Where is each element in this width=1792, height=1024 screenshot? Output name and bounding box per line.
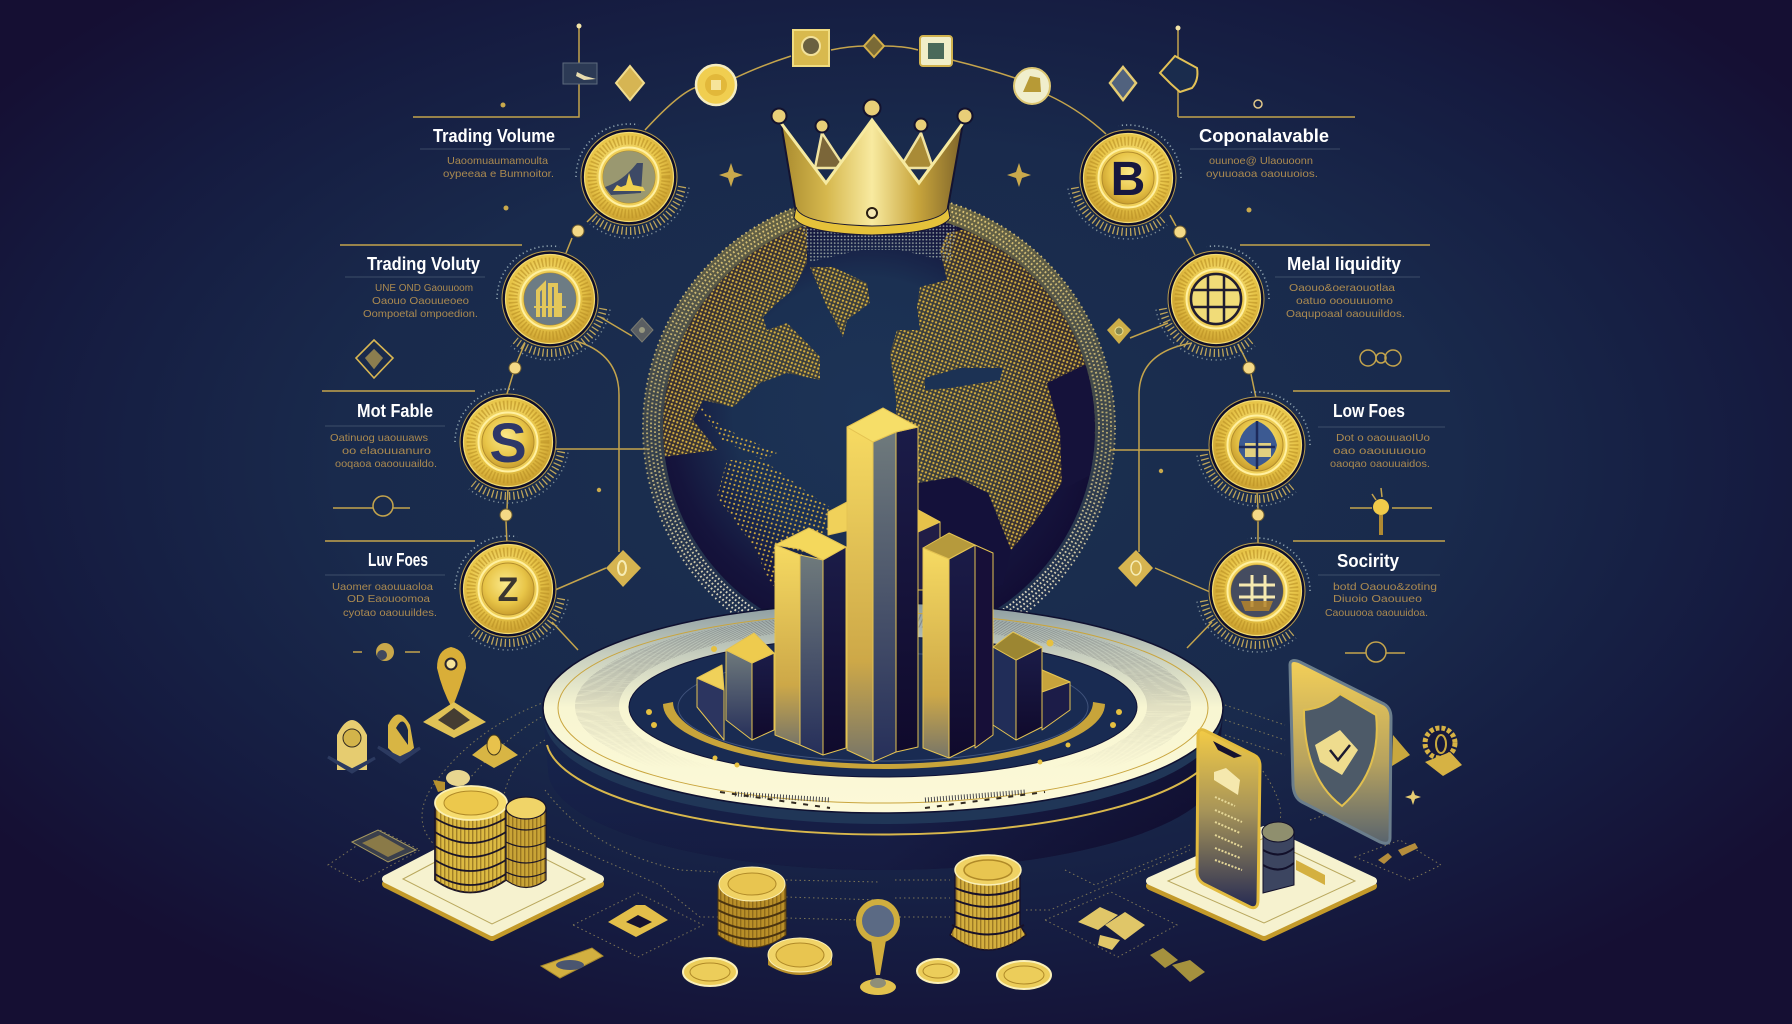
bar: far back right bbox=[918, 510, 940, 590]
coin: security grid bbox=[1197, 538, 1310, 652]
loose coin small bbox=[683, 958, 737, 986]
crown bbox=[772, 100, 972, 235]
top ornaments bbox=[333, 30, 1432, 662]
panel: Luv Foes: Luv Foes bbox=[368, 550, 428, 570]
trophy pin bbox=[856, 899, 900, 995]
panel: Mot Fable: oo elaouuanuro bbox=[342, 445, 431, 457]
crown body bbox=[781, 120, 963, 234]
left bottom icons bbox=[328, 647, 900, 995]
panel: Trading Voluty bbox=[340, 245, 522, 320]
coin: Z: Z bbox=[498, 571, 518, 609]
panel: Melal Iiquidity: Melal Iiquidity bbox=[1287, 254, 1401, 274]
icon: gold diamond left bbox=[606, 550, 641, 587]
panel: Socirity bbox=[1293, 541, 1445, 619]
panel: Melal Iiquidity: Oaqupoaal oaouuildos. bbox=[1286, 308, 1405, 320]
icon: outline diamond left bbox=[356, 340, 393, 378]
bar: far small right bbox=[1042, 670, 1070, 730]
panel: Luv Foes: OD Eaouoomoa bbox=[347, 593, 430, 605]
ornament: ring left bbox=[333, 496, 410, 516]
phone bbox=[1197, 730, 1260, 908]
ornament: bulb right bbox=[1350, 488, 1432, 535]
gold arc bbox=[663, 702, 1105, 769]
shape: gold tile bbox=[608, 905, 668, 937]
panel: Melal Iiquidity: Oaouo&oeraouotlaa bbox=[1289, 282, 1395, 294]
bar: center tallest bbox=[847, 408, 918, 762]
plate right bbox=[1150, 830, 1373, 937]
pedestal side bbox=[543, 715, 1223, 870]
panel: Mot Fable bbox=[322, 391, 475, 470]
icon: gold diamond right bbox=[1118, 550, 1153, 587]
loose coin bbox=[768, 938, 832, 975]
panel: Melal Iiquidity: oatuo ooouuuomo bbox=[1296, 295, 1393, 307]
small blocks bbox=[1150, 948, 1205, 982]
panel: Low Foes: Dot o oaouuaoIUo bbox=[1336, 432, 1430, 444]
panel: Coponalavable: Coponalavable bbox=[1199, 126, 1329, 146]
hatched ring bbox=[597, 620, 1169, 792]
inner disk bbox=[629, 637, 1137, 777]
panel: Melal Iiquidity bbox=[1240, 245, 1430, 320]
panel: Socirity: Caouuooa oaouuidoa. bbox=[1325, 607, 1428, 619]
link dots bbox=[500, 225, 1264, 521]
card bbox=[541, 948, 603, 978]
pedestal bbox=[543, 603, 1223, 870]
small circle bbox=[1254, 100, 1262, 108]
bottom hatch labels bbox=[735, 792, 1025, 800]
cylinder stack bbox=[1262, 822, 1294, 893]
document bbox=[352, 830, 416, 862]
panel: Trading Voluty: Oompoetal ompoedion. bbox=[363, 308, 478, 320]
dashed floor lines bbox=[328, 702, 1441, 957]
icon: diamond right bbox=[1110, 67, 1136, 100]
panel: Low Foes: oao oaouuuouo bbox=[1333, 445, 1426, 457]
crown stud bbox=[867, 208, 877, 218]
icon: top diamond bbox=[864, 35, 884, 57]
panel: Mot Fable: Oatinuog uaouuaws bbox=[330, 432, 428, 444]
coin: bitcoin bbox=[1068, 125, 1181, 239]
bar chart bbox=[697, 408, 1070, 762]
icon: shield outline bbox=[1160, 56, 1197, 92]
icon: diamond coin bbox=[472, 735, 518, 768]
coin: trading volume chart bbox=[576, 124, 689, 238]
bar: left tall bbox=[775, 528, 846, 755]
icon: small coin back bbox=[433, 770, 470, 792]
pedestal top bbox=[543, 603, 1223, 813]
gear badge bbox=[1425, 728, 1462, 776]
panel: Luv Foes bbox=[325, 541, 475, 619]
coin stack center right bbox=[950, 855, 1026, 950]
ornament: rings right bbox=[1360, 350, 1401, 366]
stars bbox=[500, 102, 1252, 492]
icon: map pin bbox=[423, 647, 486, 738]
plate left bbox=[386, 824, 600, 937]
icon: box bird bbox=[563, 63, 597, 84]
coin: globe grid bbox=[1156, 246, 1269, 360]
right bottom icons bbox=[917, 661, 1462, 989]
shield card bbox=[1290, 661, 1391, 843]
coin: Z bbox=[455, 536, 568, 650]
panel: Trading Volume bbox=[413, 24, 582, 180]
triangle bbox=[1392, 735, 1410, 766]
bar: far back left bbox=[828, 502, 850, 535]
icon: small diamond left bbox=[631, 318, 653, 342]
gold stick bbox=[1296, 860, 1325, 885]
panel: Mot Fable: Mot Fable bbox=[357, 401, 433, 421]
crown back points bbox=[815, 133, 933, 168]
panel: Trading Voluty: Trading Voluty bbox=[367, 254, 480, 274]
coin: bitcoin: B bbox=[1111, 153, 1145, 206]
icon: diamond left bbox=[616, 66, 644, 100]
coin stack small bbox=[506, 797, 546, 888]
coin: low fees blue bbox=[1197, 392, 1310, 506]
panel: Trading Volume: oypeeaa e Bumnoitor. bbox=[443, 168, 554, 180]
shape: gold blocks bbox=[1078, 907, 1145, 950]
bar: small left bbox=[726, 633, 774, 740]
loose coin a bbox=[917, 959, 959, 983]
icon: top square two bbox=[920, 36, 952, 66]
loose coin b bbox=[997, 961, 1051, 989]
pedestal rim bbox=[544, 610, 1222, 824]
icon: top square bbox=[793, 30, 829, 66]
small glyphs bbox=[1378, 843, 1418, 864]
panel: Socirity: Diuoio Oaouueo bbox=[1333, 593, 1422, 605]
sparkle bbox=[1405, 790, 1421, 805]
panel: Mot Fable: ooqaoa oaoouuaildo. bbox=[335, 458, 437, 470]
icon: small coin left bbox=[696, 65, 736, 105]
panel: Luv Foes: cyotao oaouuildes. bbox=[343, 607, 437, 619]
coin: S bbox=[455, 389, 568, 503]
crown balls bbox=[772, 100, 972, 132]
panel: Coponalavable: ouunoe@ Ulaouoonn bbox=[1209, 155, 1313, 167]
icon: small diamond right bbox=[1107, 318, 1131, 344]
ornament: ring right bbox=[1345, 642, 1405, 662]
coin: trading buildings bbox=[497, 246, 610, 360]
panel: Socirity: botd Oaouo&zoting bbox=[1333, 581, 1437, 593]
panel: Socirity: Socirity bbox=[1337, 551, 1399, 571]
panel: Low Foes bbox=[1293, 391, 1450, 470]
bar: far small left bbox=[697, 665, 724, 740]
ornament: small icon left bbox=[353, 643, 420, 661]
panel: Trading Volume: Trading Volume bbox=[433, 126, 555, 146]
coin: S: S bbox=[489, 411, 527, 474]
panel: Trading Voluty: Oaouo Oaouueoeo bbox=[372, 295, 469, 307]
panel: Trading Voluty: UNE OND Gaouuoom bbox=[375, 282, 473, 294]
panel: Luv Foes: Uaomer oaouuaoloa bbox=[332, 581, 433, 593]
bar: right tall bbox=[923, 533, 993, 758]
globe dark africa bbox=[905, 477, 1011, 600]
coin stack large bbox=[435, 786, 507, 892]
inner dots bbox=[646, 640, 1122, 768]
connector lines bbox=[506, 46, 1258, 650]
panel: Coponalavable bbox=[1176, 26, 1355, 180]
coin stack center left bbox=[718, 867, 786, 948]
world map dots bbox=[663, 222, 1095, 586]
panel: Low Foes: oaoqao oaouuaidos. bbox=[1330, 458, 1430, 470]
icon: small coin right bbox=[1014, 68, 1050, 104]
icon: arch pedestal bbox=[328, 720, 375, 772]
panel: Trading Volume: Uaoomuaumamoulta bbox=[447, 155, 548, 167]
panel: Low Foes: Low Foes bbox=[1333, 401, 1405, 421]
bar: small right bbox=[993, 632, 1042, 740]
pedestal gold line bbox=[547, 745, 1219, 835]
crown band bbox=[794, 207, 950, 235]
icon: lock bbox=[378, 714, 420, 762]
panel: Coponalavable: oyuuoaoa oaouuoios. bbox=[1206, 168, 1318, 180]
globe bbox=[642, 202, 1116, 613]
